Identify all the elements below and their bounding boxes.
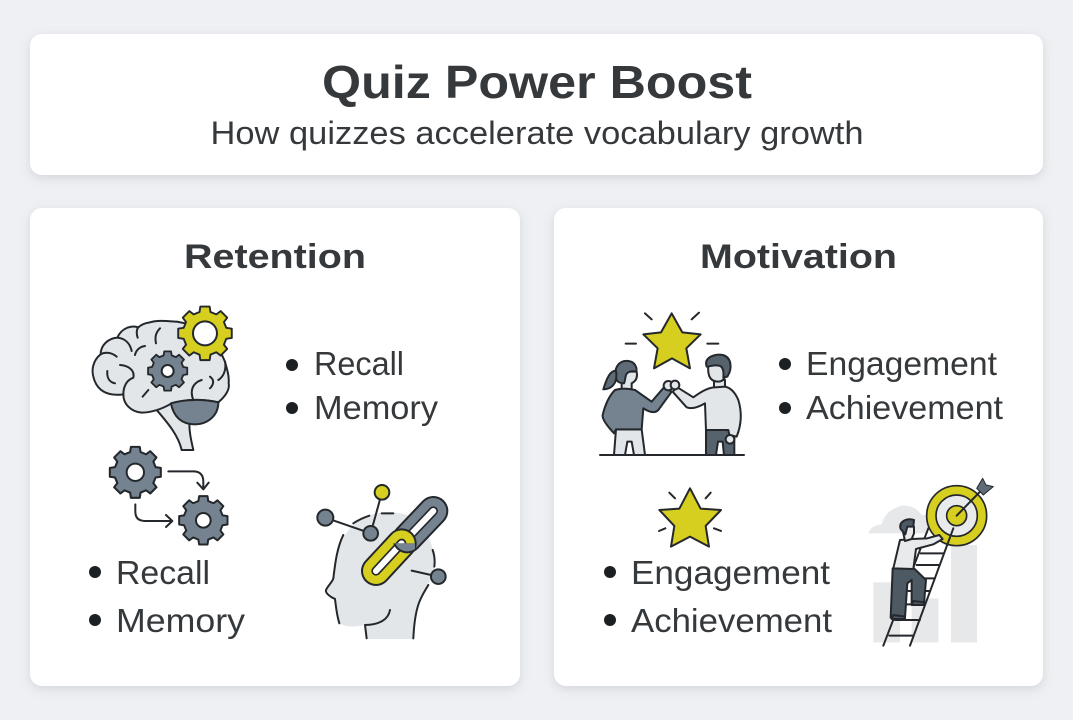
grey gear [148,351,187,391]
icon: two people fist bump under a star [600,313,744,455]
panel: motivation [554,208,1043,686]
icon: brain with gears [93,307,232,450]
bullets: recall and memory, lower: Recall [116,554,210,591]
subtitle: How quizzes accelerate vocabulary growth [210,115,864,151]
motivation heading: Motivation [700,238,897,276]
icon: head with chain link [317,485,446,639]
woman [614,429,645,455]
bullets: recall and memory, lower [89,554,246,639]
bullets: engagement and achievement, upper [779,345,1003,426]
yellow gear [178,307,232,360]
grey link overlap [393,543,415,554]
header panel [30,34,1043,175]
icon: climber on ladder reaching target [868,478,993,646]
bullets: engagement and achievement, lower: Engagement [631,554,830,591]
bullets: recall and memory, upper: Recall [314,345,404,382]
icon: gears with arrows [110,447,227,544]
retention heading: Retention [184,238,366,276]
target [927,486,987,546]
panel: retention [30,208,520,686]
bullets: engagement and achievement, upper: Achievement [806,389,1003,426]
bullets: recall and memory, upper [286,345,439,426]
bullets: engagement and achievement, lower [604,554,832,639]
bullets: engagement and achievement, lower: Achievement [631,602,832,639]
ladder [883,528,953,646]
climber [891,568,926,618]
bullets: recall and memory, upper: Memory [314,389,439,426]
icon: star with rays [659,488,721,547]
bars and cloud backdrop [873,545,977,642]
title: Quiz Power Boost [322,56,752,108]
bullets: recall and memory, lower: Memory [116,602,246,639]
grey link [407,511,433,538]
man [706,430,734,455]
yellow link [376,543,402,571]
bullets: engagement and achievement, upper: Engagement [806,345,997,382]
